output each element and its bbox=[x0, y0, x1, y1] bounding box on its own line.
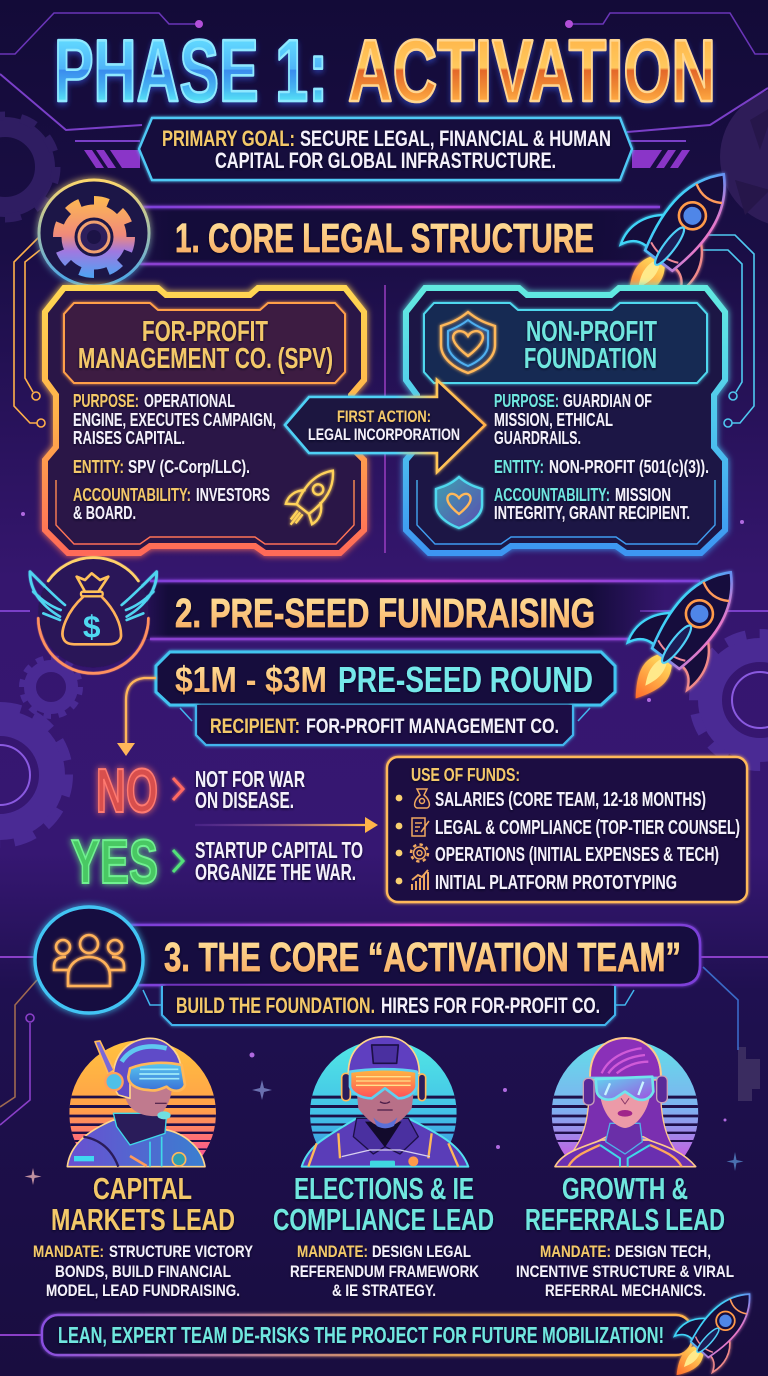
for-profit header box bbox=[64, 303, 345, 383]
fund items bbox=[435, 789, 740, 894]
icon: gear badge bbox=[39, 180, 149, 286]
role: elections and ie compliance lead: & IE STRATEGY. bbox=[332, 1281, 436, 1300]
role: growth and referrals lead: REFERRAL MECHANICS. bbox=[545, 1281, 706, 1300]
no label: ON DISEASE. bbox=[195, 787, 294, 813]
recipient box bbox=[180, 705, 590, 745]
non-profit details: ACCOUNTABILITY: bbox=[494, 485, 610, 505]
for-profit details: ACCOUNTABILITY: bbox=[73, 485, 191, 505]
footer banner bbox=[42, 1315, 692, 1355]
role: growth and referrals lead: DESIGN TECH, bbox=[615, 1242, 711, 1261]
icon: rocket bottom bbox=[655, 1275, 768, 1376]
non-profit details: MISSION bbox=[615, 485, 671, 505]
section 2 heading band bbox=[125, 581, 700, 639]
icon: shield with heart bbox=[441, 312, 495, 373]
role: capital markets lead: MARKETS LEAD bbox=[51, 1202, 235, 1237]
panel: for-profit bbox=[45, 288, 364, 553]
title bbox=[54, 21, 716, 120]
non-profit details: MISSION, ETHICAL bbox=[494, 410, 613, 430]
non-profit details: ENTITY: bbox=[494, 457, 544, 477]
role: capital markets lead: MANDATE: bbox=[33, 1242, 104, 1261]
for-profit header box: MANAGEMENT CO. (SPV) bbox=[78, 343, 333, 375]
panel: non-profit bbox=[406, 288, 725, 553]
section 1 heading band: 1. CORE LEGAL STRUCTURE bbox=[175, 215, 594, 261]
subheading box: build the foundation: HIRES FOR FOR-PROFIT CO. bbox=[381, 993, 600, 1018]
fund items: INITIAL PLATFORM PROTOTYPING bbox=[435, 872, 677, 894]
non-profit details: PURPOSE: bbox=[494, 391, 559, 411]
icon: winged money bag bbox=[30, 557, 157, 673]
role: elections and ie compliance lead: COMPLIANCE LEAD bbox=[273, 1202, 494, 1237]
avatar: growth and referrals lead bbox=[548, 1038, 702, 1167]
for-profit details: SPV (C-Corp/LLC). bbox=[128, 457, 250, 477]
for-profit details: OPERATIONAL bbox=[144, 391, 235, 411]
primary goal banner: CAPITAL FOR GLOBAL INFRASTRUCTURE. bbox=[215, 148, 556, 173]
icon: outline rocket bbox=[276, 460, 347, 536]
non-profit details: INTEGRITY, GRANT RECIPIENT. bbox=[494, 503, 690, 523]
for-profit details: ENGINE, EXECUTES CAMPAIGN, bbox=[73, 410, 276, 430]
arrow: first action: LEGAL INCORPORATION bbox=[308, 425, 460, 444]
for-profit details: & BOARD. bbox=[73, 503, 136, 523]
arrow: first action bbox=[285, 380, 485, 472]
subheading box: build the foundation bbox=[143, 986, 634, 1025]
yes label: STARTUP CAPITAL TO bbox=[195, 837, 363, 863]
icon: filled shield bbox=[436, 477, 482, 528]
arrow: to use of funds bbox=[195, 817, 378, 833]
no label: NOT FOR WAR bbox=[195, 766, 305, 792]
role: growth and referrals lead: GROWTH & bbox=[562, 1171, 688, 1206]
panel: use of funds: USE OF FUNDS: bbox=[411, 765, 520, 785]
role: elections and ie compliance lead bbox=[273, 1171, 494, 1300]
role: capital markets lead: MODEL, LEAD FUNDRAISING. bbox=[46, 1281, 240, 1300]
funding amount box: PRE-SEED ROUND bbox=[338, 659, 593, 700]
section 2 heading band: 2. PRE-SEED FUNDRAISING bbox=[175, 590, 595, 636]
role: elections and ie compliance lead: MANDATE: bbox=[297, 1242, 368, 1261]
icon: rocket top bbox=[595, 149, 755, 324]
for-profit details: RAISES CAPITAL. bbox=[73, 428, 185, 448]
yes label bbox=[71, 828, 363, 897]
for-profit details: ENTITY: bbox=[73, 457, 124, 477]
non-profit header box bbox=[424, 303, 707, 383]
primary goal banner bbox=[139, 118, 632, 180]
avatar: capital markets lead bbox=[67, 1038, 220, 1167]
non-profit details: GUARDRAILS. bbox=[494, 428, 581, 448]
no label bbox=[96, 757, 305, 826]
icon: winged money bag: $ bbox=[83, 609, 101, 645]
section 1 heading band bbox=[130, 207, 670, 264]
non-profit header box: NON-PROFIT bbox=[526, 316, 657, 348]
recipient box: RECIPIENT: bbox=[210, 715, 300, 738]
icon: rocket middle bbox=[602, 547, 762, 722]
role: capital markets lead: STRUCTURE VICTORY bbox=[109, 1242, 254, 1261]
background gears and planet bbox=[0, 87, 768, 1101]
panel: use of funds bbox=[387, 757, 747, 902]
non-profit details: NON-PROFIT (501(c)(3)). bbox=[549, 457, 709, 477]
role: growth and referrals lead bbox=[516, 1171, 734, 1300]
role: capital markets lead: BONDS, BUILD FINANCIAL bbox=[55, 1262, 231, 1281]
arrow: first action: FIRST ACTION: bbox=[337, 407, 431, 426]
background stars bbox=[21, 512, 744, 1185]
for-profit details bbox=[73, 391, 276, 523]
no label: NO bbox=[96, 757, 158, 826]
yes label: ORGANIZE THE WAR. bbox=[195, 859, 356, 885]
for-profit details: PURPOSE: bbox=[73, 391, 139, 411]
role: capital markets lead: CAPITAL bbox=[93, 1171, 192, 1206]
section 3 heading band bbox=[100, 925, 700, 985]
non-profit header box: FOUNDATION bbox=[524, 343, 657, 375]
subheading box: build the foundation: BUILD THE FOUNDATION. bbox=[176, 993, 375, 1018]
recipient box: FOR-PROFIT MANAGEMENT CO. bbox=[306, 715, 559, 738]
non-profit details bbox=[494, 391, 709, 523]
funding amount box bbox=[156, 652, 615, 705]
funding amount box: $1M - $3M bbox=[175, 659, 327, 700]
icon: team badge bbox=[35, 907, 143, 1013]
avatar: elections and compliance lead bbox=[302, 1037, 468, 1167]
role: growth and referrals lead: MANDATE: bbox=[540, 1242, 611, 1261]
fund bullets and icons bbox=[396, 789, 429, 890]
primary goal banner: PRIMARY GOAL: bbox=[162, 126, 295, 151]
yes label: YES bbox=[71, 828, 158, 897]
arrow: down to no bbox=[117, 678, 156, 756]
non-profit details: GUARDIAN OF bbox=[563, 391, 652, 411]
primary goal banner: SECURE LEGAL, FINANCIAL & HUMAN bbox=[300, 126, 611, 151]
role: elections and ie compliance lead: ELECTIONS & IE bbox=[294, 1171, 474, 1206]
role: elections and ie compliance lead: DESIGN LEGAL bbox=[372, 1242, 471, 1261]
role: capital markets lead bbox=[33, 1171, 254, 1300]
for-profit header box: FOR-PROFIT bbox=[142, 316, 268, 348]
role: elections and ie compliance lead: REFERENDUM FRAMEWORK bbox=[290, 1262, 480, 1281]
for-profit details: INVESTORS bbox=[196, 485, 270, 505]
title: PHASE 1: bbox=[54, 21, 328, 120]
